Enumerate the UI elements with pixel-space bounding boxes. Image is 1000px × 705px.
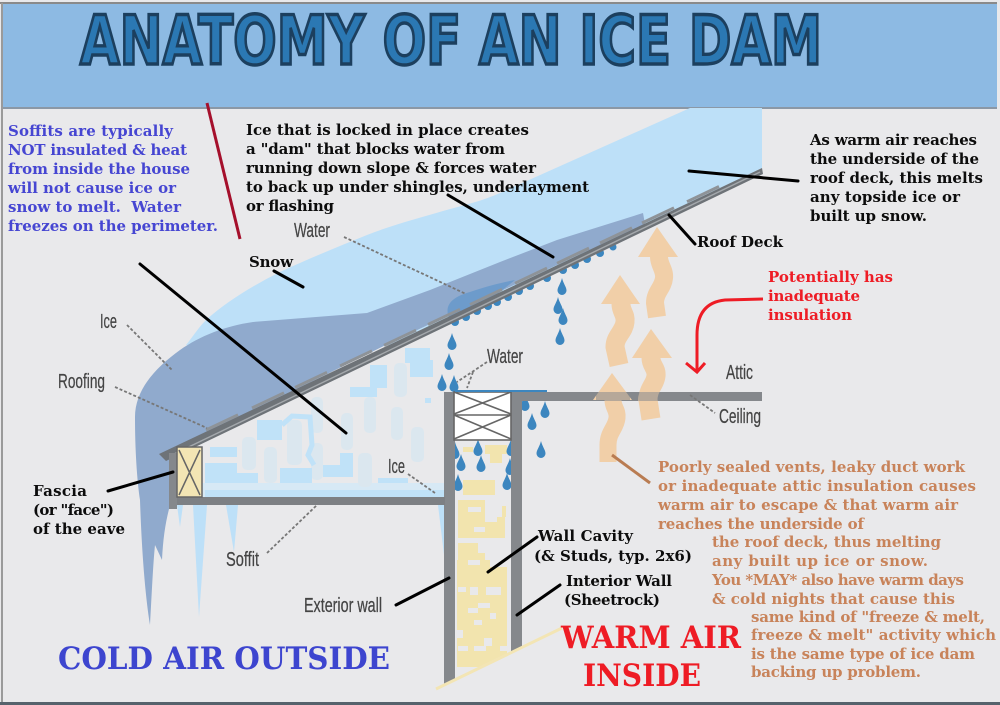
text: dam explanation: or flashing [246, 197, 334, 215]
pale floor ice band [202, 483, 445, 497]
ice layer on roof and eave [135, 213, 645, 625]
label: soffit: Soffit [226, 549, 259, 571]
label: ice: Ice [100, 311, 117, 333]
label: ceiling: Ceiling [719, 406, 761, 428]
bottom page edge [0, 702, 1000, 705]
attic warm air arrows [593, 227, 678, 462]
leader: water drops [457, 362, 487, 388]
text: soffits note: NOT insulated & heat [8, 141, 187, 159]
text: potentially inadequate insulation [768, 268, 893, 324]
heading: warm air inside: WARM AIR [560, 620, 741, 656]
text: soffits note: snow to melt. Water [8, 198, 182, 216]
text: dam explanation: to back up under shingles, underlayment [246, 178, 589, 196]
snow layer on roof [186, 108, 762, 348]
text: soffits note: will not cause ice or [7, 179, 177, 197]
icicles under soffit [177, 505, 445, 617]
text: soffits note [7, 122, 218, 235]
text: warm air explanation: same kind of "freeze & melt, [751, 608, 985, 626]
left page edge [1, 3, 3, 703]
label: ice at soffit: Ice [388, 456, 405, 478]
text: warm air explanation [657, 458, 996, 681]
text: warm air note [809, 131, 983, 225]
leader: ceiling [690, 395, 715, 413]
text: dam explanation [246, 121, 589, 215]
pointer: exterior wall [396, 578, 449, 605]
ice patches in attic [205, 348, 445, 497]
leader: ice [127, 325, 172, 370]
text: fascia label: Fascia [33, 482, 87, 500]
interior wall [511, 392, 522, 654]
text: potentially inadequate insulation: inadequate [768, 287, 860, 305]
text: potentially inadequate insulation: insulation [768, 306, 852, 324]
text: dam explanation: a "dam" that blocks water from [246, 140, 505, 158]
red divider line [207, 103, 240, 239]
leader: ice wall [408, 474, 435, 493]
wall cavity drops [450, 439, 516, 491]
arrow 1 [638, 227, 678, 317]
label: exterior wall: Exterior wall [304, 595, 382, 617]
leader: soffit [267, 505, 317, 553]
heading: warm air inside: INSIDE [583, 658, 701, 694]
text: warm air note: any topside ice or [810, 188, 961, 206]
text: soffits note: Soffits are typically [8, 122, 174, 140]
ground slope line [436, 628, 562, 689]
water pooled under ice [448, 280, 515, 318]
text: warm air explanation: is the same type of ice dam [751, 645, 975, 663]
pointer: wall cavity [488, 537, 537, 572]
text: wall cavity label [534, 527, 692, 565]
text: warm air explanation: & cold nights that cause this [712, 590, 955, 608]
label: attic: Attic [726, 362, 753, 384]
pointer: fascia [108, 472, 173, 491]
exterior wall [444, 392, 455, 684]
leader: water roof [344, 237, 466, 294]
heading: cold air outside: COLD AIR OUTSIDE [58, 641, 390, 677]
heading: warm air inside [560, 620, 741, 694]
text: wall cavity label: Wall Cavity [537, 527, 634, 545]
wall cavity insulation [457, 445, 507, 667]
text: fascia label: of the eave [33, 520, 125, 538]
text: warm air note: the underside of the [810, 150, 979, 168]
text: warm air explanation: or inadequate attic insulation causes [658, 477, 976, 495]
text: warm air explanation: freeze & melt" activity which [751, 626, 996, 644]
text: warm air explanation: reaches the underside of [658, 515, 866, 533]
text: warm air explanation: backing up problem. [751, 663, 921, 681]
text: warm air explanation: the roof deck, thus melting [712, 533, 942, 551]
label: roofing: Roofing [58, 371, 105, 393]
ceiling showing through warm air [596, 392, 663, 401]
text: wall cavity label: (& Studs, typ. 2x6) [534, 547, 692, 565]
text: warm air note: As warm air reaches [809, 131, 977, 149]
pointer: warm air [689, 171, 798, 181]
text: dam explanation: running down slope & forces water [246, 159, 537, 177]
falling water drops [438, 278, 568, 458]
label: snow: Snow [249, 253, 294, 271]
text: warm air explanation: warm air to escape & that warm air [657, 496, 959, 514]
text: soffits note: freezes on the perimeter. [8, 217, 218, 235]
text: dam explanation: Ice that is locked in place creates [246, 121, 529, 139]
text: interior wall label: Interior Wall [566, 572, 672, 590]
pointer: snow [274, 271, 303, 287]
soffit [177, 497, 445, 505]
ceiling [512, 392, 762, 401]
text: warm air explanation: You *MAY* also have warm days [711, 571, 964, 589]
text: warm air explanation: Poorly sealed vents, leaky duct work [658, 458, 966, 476]
text: warm air explanation: any built up ice or snow. [712, 552, 928, 570]
fascia [169, 453, 177, 509]
arrow: insulation [686, 299, 763, 372]
header band [0, 2, 997, 109]
faint warm air ghosts in attic [242, 363, 424, 487]
text: interior wall label: (Sheetrock) [564, 591, 660, 609]
water on top plate [455, 390, 547, 392]
pointer: soffit note [140, 264, 346, 433]
insulation gaps [457, 507, 507, 651]
text: warm air note: built up snow. [810, 207, 927, 225]
label: water at wall: Water [487, 346, 523, 368]
arrow 4 [593, 373, 632, 462]
arrow 3 [632, 329, 672, 419]
roof deck [159, 168, 763, 461]
top plate studs [454, 392, 511, 440]
text: interior wall label [564, 572, 672, 609]
label: roof deck: Roof Deck [697, 233, 784, 251]
text: warm air note: roof deck, this melts [810, 169, 983, 187]
text: soffits note: from inside the house [8, 160, 190, 178]
leader: roofing [115, 387, 207, 428]
arrow 2 [601, 275, 640, 365]
text: fascia label [33, 482, 125, 538]
pointer: warm air leak [612, 455, 650, 483]
pointer: roof deck [669, 215, 695, 244]
pointer: dam [448, 195, 553, 257]
text: fascia label: (or "face") [33, 501, 114, 519]
label: water: Water [294, 220, 330, 242]
fascia block [177, 447, 202, 497]
floor below the slope cut [436, 628, 562, 702]
pointer: interior wall [517, 585, 560, 615]
drips along the roof underside [451, 244, 616, 326]
text: potentially inadequate insulation: Potentially has [768, 268, 893, 286]
